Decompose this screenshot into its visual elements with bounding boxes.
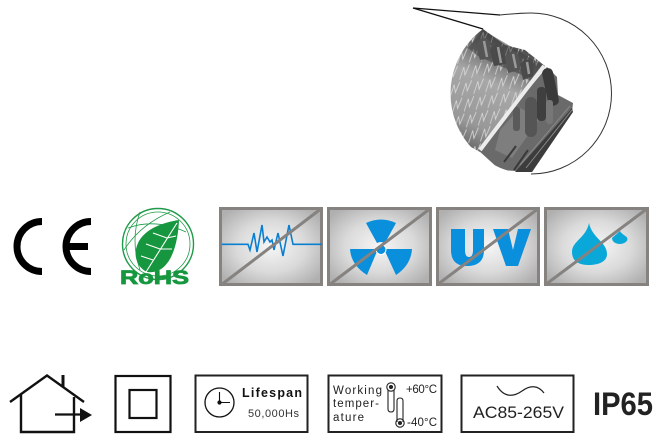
icon: blue waveform xyxy=(222,225,322,256)
base xyxy=(478,67,573,172)
voltage label: AC85-265V xyxy=(473,404,564,422)
icon: CE mark xyxy=(17,221,91,272)
fin tops xyxy=(477,38,490,60)
callout outline xyxy=(500,13,612,174)
icon: clock xyxy=(205,388,234,417)
panel: no radiation xyxy=(328,208,431,285)
icon: thermometers xyxy=(387,383,404,427)
icon: radiation trefoil xyxy=(350,220,412,275)
box: lifespan: 50,000Hs xyxy=(248,408,300,420)
icon: water drops xyxy=(572,223,628,265)
icon: AC sine wave xyxy=(497,386,544,395)
UV letters xyxy=(451,229,531,266)
label: IP65 rating: IP65 xyxy=(593,386,653,422)
panel: no electrical noise xyxy=(220,208,322,285)
box: working temperature xyxy=(328,376,442,432)
box: lifespan xyxy=(196,376,308,432)
callout: magnified heat sink detail xyxy=(413,8,612,174)
box: input voltage xyxy=(462,376,574,432)
lifespan label: Lifespan xyxy=(242,386,302,400)
box: working temperature: -40°C xyxy=(407,417,437,429)
product photo: fins and base xyxy=(440,29,573,172)
icon: indoor use house xyxy=(10,375,92,432)
icon: class II double square xyxy=(116,376,170,432)
panel: no water xyxy=(545,208,648,285)
working temperature label: Working xyxy=(333,385,382,397)
working temperature label: temper- xyxy=(333,398,379,410)
RoHS label: RoHS xyxy=(120,268,189,289)
temperature values: +60°C xyxy=(406,384,437,396)
working temperature label: ature xyxy=(333,412,364,424)
panel: no UV xyxy=(437,208,539,285)
icon: RoHS leaf xyxy=(120,208,194,289)
